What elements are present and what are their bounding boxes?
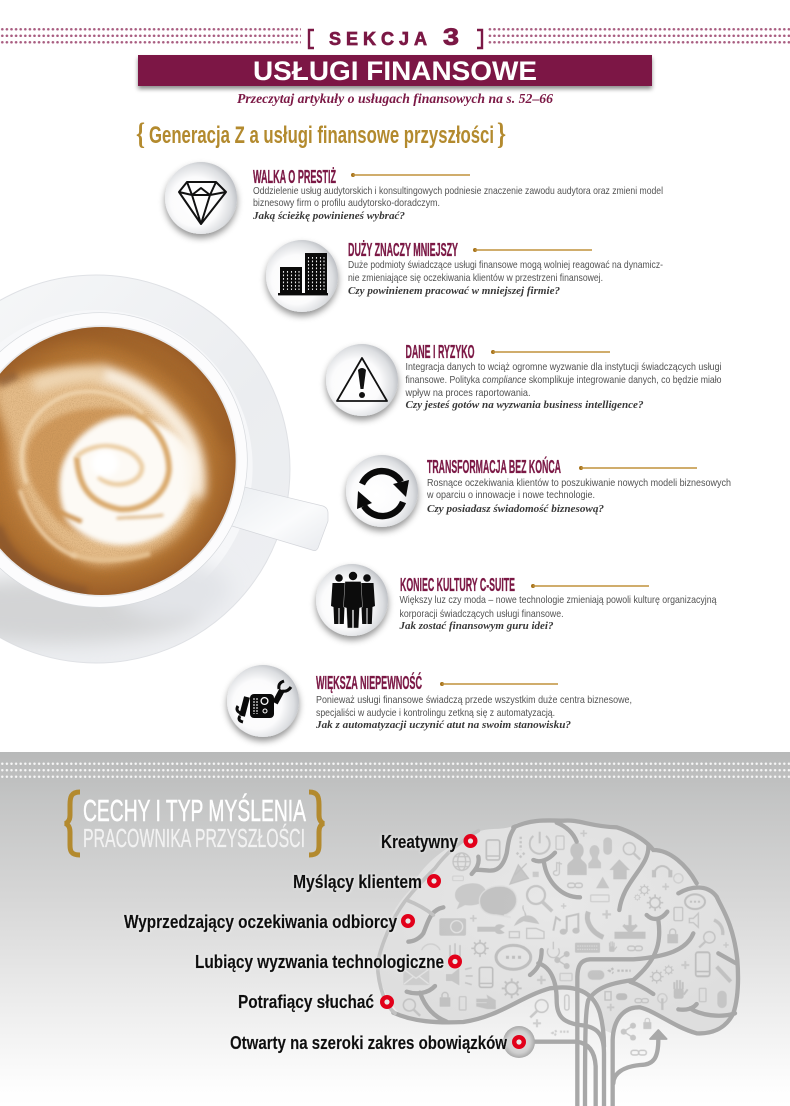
text: Duże podmioty świadczące usługi finansowe mogą wolniej reagować na dynamicz- [348,260,663,271]
item 5: end of c-suite [316,564,717,636]
connector [473,248,592,252]
text: wpływ na proces raportowania. [405,388,530,399]
text [348,260,663,297]
text: Czy powinienem pracować w mniejszej firmie? [348,285,560,297]
text: Jak zostać finansowym guru idei? [399,620,554,632]
cup body and coffee [0,313,247,607]
item 6: uncertainty [227,665,632,737]
title bar: USŁUGI FINANSOWE [253,56,537,86]
text: Jak z automatyzacji uczynić atut na swoim stanowisku? [315,719,571,731]
section label [309,24,482,51]
trait: tech challenges: Lubiący wyzwania technologiczne [195,952,444,972]
subtitle: Przeczytaj artykuły o usługach finansowych na s. 52–66 [237,92,553,107]
title bar [138,55,652,86]
text [405,362,722,411]
connector [440,682,558,686]
heading: WIĘKSZA NIEPEWNOŚĆ [316,672,422,693]
section label: SEKCJA [329,29,427,49]
text [399,595,717,632]
fading left outline [377,831,478,1013]
text: Czy posiadasz świadomość biznesową? [427,503,605,515]
text [426,478,731,515]
heading: traits [65,792,324,855]
brain circuit lines [393,820,738,1106]
icon: cycle arrows [346,455,418,527]
panel: traits of the future employee [0,752,790,1106]
text: w oparciu o innowacje i nowe technologie. [426,490,595,501]
connector [579,466,697,470]
text: Integracja danych to wciąż ogromne wyzwanie dla instytucji świadczących usługi [406,362,722,373]
icon: three businessmen [316,564,388,636]
text: Ponieważ usługi finansowe świadczą przede wszystkim duże centra biznesowe, [316,695,632,706]
item 3: data and risk [326,342,722,416]
item 4: transformation: TRANSFORMACJA BEZ KOŃCA [427,456,561,477]
text: Rosnące oczekiwania klientów to poszukiwanie nowych modeli biznesowych [427,478,731,489]
text: Oddzielenie usług audytorskich i konsultingowych podniesie znaczenie zawodu audytora oraz zmieni model [253,186,663,197]
heading: Generation Z [136,116,506,151]
dotted band left [0,28,301,48]
text: biznesowy firm o profilu audytorsko-doradczym. [253,198,440,209]
section label: 3 [443,24,459,51]
cup handle [222,484,328,551]
connector [491,350,610,354]
item 3: data and risk: DANE I RYZYKO [406,342,474,362]
icon: warning [326,344,398,416]
icon: diamond [165,162,237,234]
item 1: prestige [165,162,663,234]
text: Czy jesteś gotów na wyzwania business intelligence? [406,399,644,411]
connector [531,584,649,588]
heading: Generation Z: } [497,116,506,151]
saucer [0,275,290,663]
trait: open to wide duties: Otwarty na szeroki zakres obowiązków [230,1033,508,1053]
trait: anticipating: Wyprzedzający oczekiwania odbiorcy [124,912,397,932]
coffee cup photo [0,275,328,663]
heading: Generation Z: { [136,116,145,151]
text [252,186,663,222]
dotted band right [488,28,790,48]
trait: client thinking: Myślący klientem [293,872,422,892]
brain diagram [377,819,738,1106]
trait: creative: Kreatywny [381,832,458,852]
connector [351,173,470,177]
brain icons [403,830,731,1055]
heading: WALKA O PRESTIŻ [253,167,336,187]
brain silhouette [377,819,738,1033]
text: nie zmieniające się oczekiwania klientów w przestrzeni finansowej. [348,273,603,284]
heading: traits: CECHY I TYP MYŚLENIA [83,792,306,828]
item 2: big means smaller: DUŻY ZNACZY MNIEJSZY [348,240,458,260]
text [315,695,632,731]
trait: open to wide duties [230,1026,535,1058]
heading: Generation Z: Generacja Z a usługi finansowe przyszłości [149,122,494,149]
text: Jaką ścieżkę powinieneś wybrać? [252,210,405,222]
text: finansowe. Polityka compliance skomplikuje integrowanie danych, co będzie miało [406,375,722,386]
icon: buildings [266,240,338,312]
item 5: end of c-suite: KONIEC KULTURY C-SUITE [400,575,515,595]
item 2: big means smaller [266,240,663,312]
text: korporacji świadczących usługi finansowe. [400,609,564,620]
text: specjaliści w audycie i kontrolingu zetkną się z automatyzacją. [316,708,555,719]
item 4: transformation [346,455,731,527]
text: Większy luz czy moda – nowe technologie zmieniają powoli kulturę organizacyjną [400,595,717,606]
icon: robot [227,665,299,737]
trait: listening: Potrafiący słuchać [238,992,374,1012]
heading: traits: PRACOWNIKA PRZYSZŁOŚCI [83,823,305,853]
